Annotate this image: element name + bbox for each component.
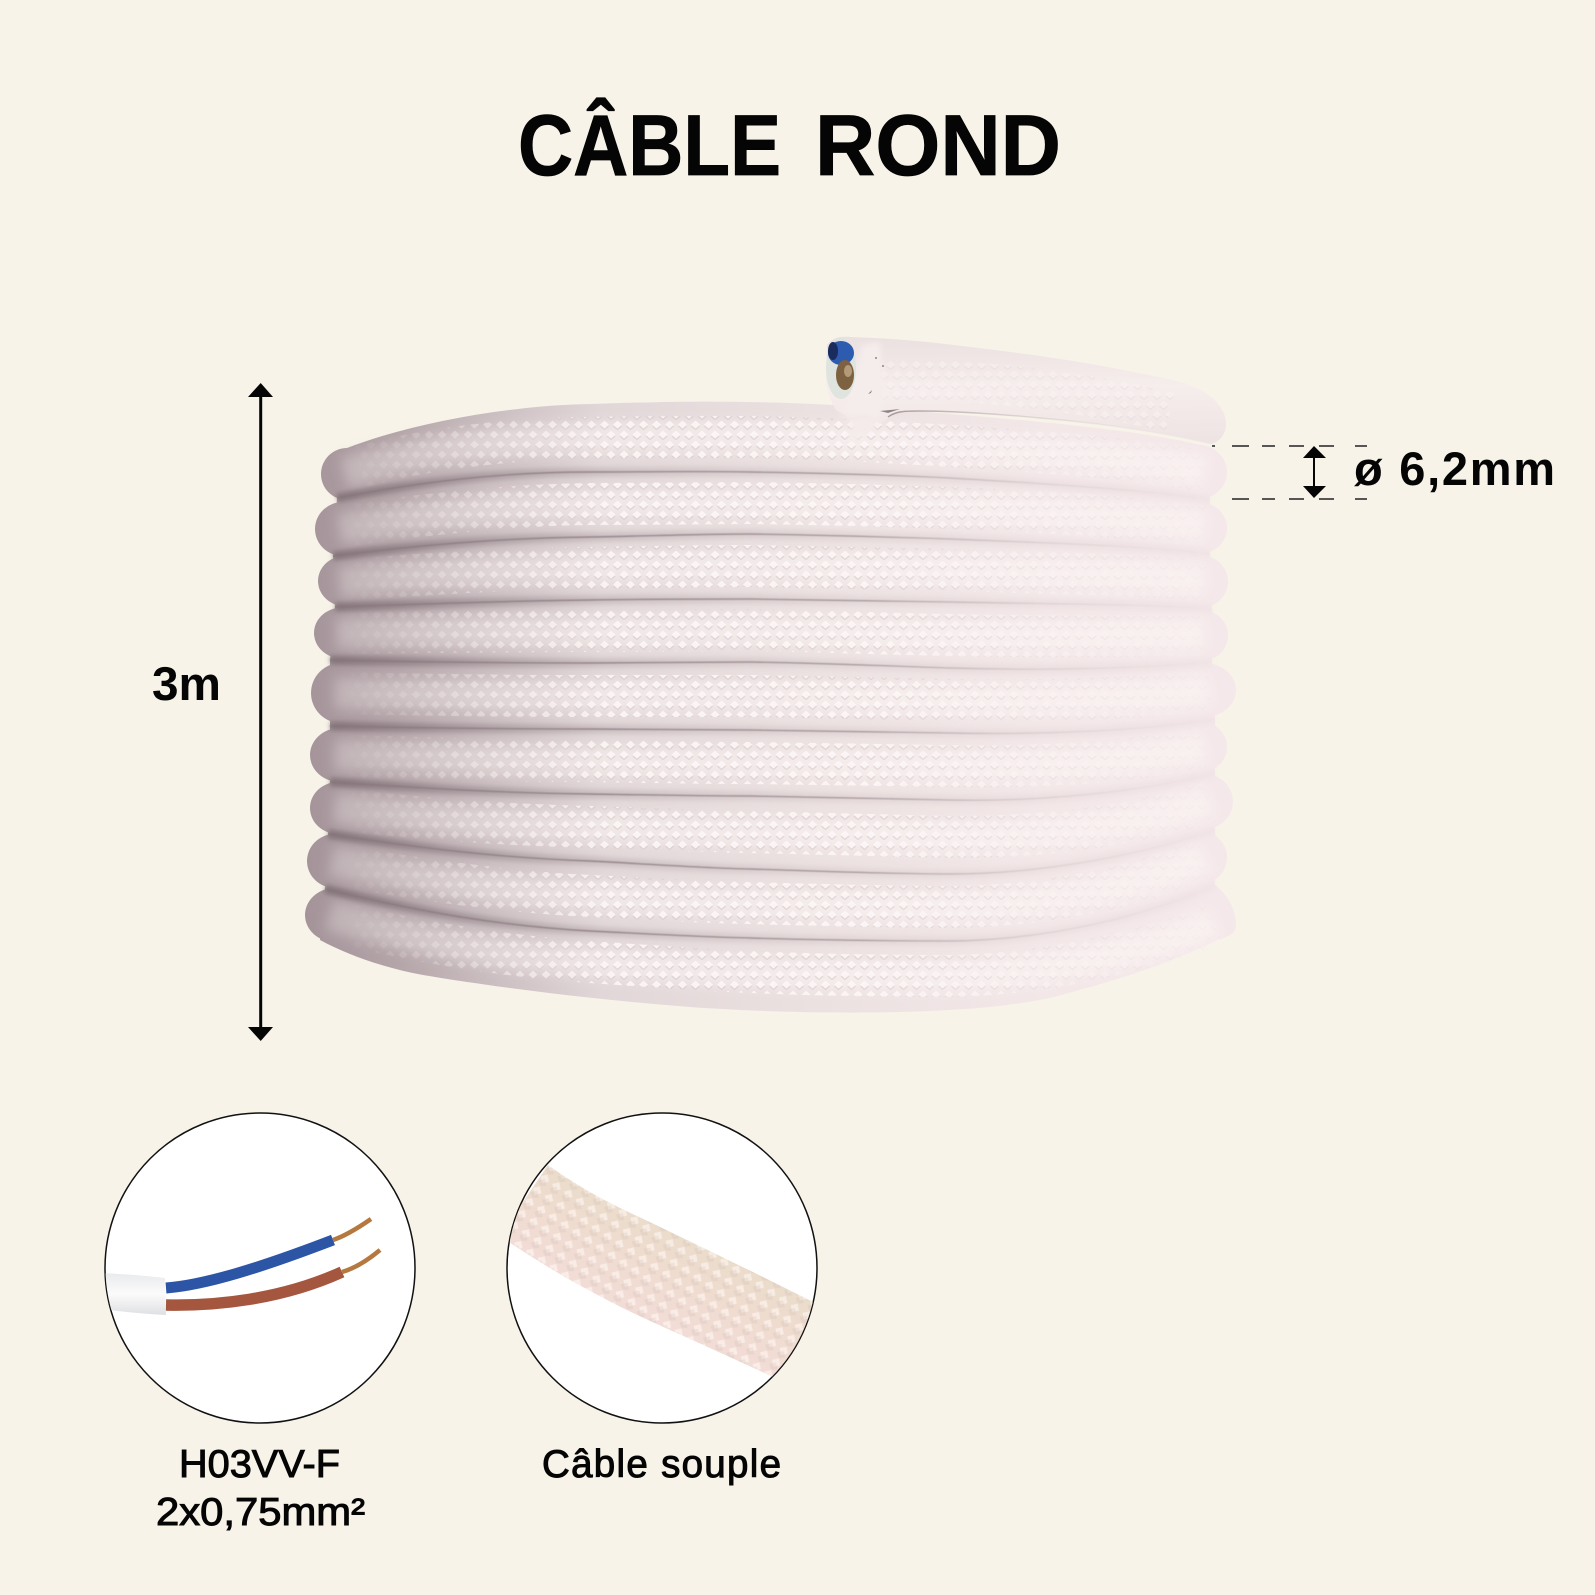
length label: 3m	[152, 657, 221, 710]
grooves between coils	[325, 472, 1215, 941]
title	[518, 97, 1061, 194]
braid texture	[378, 416, 1090, 997]
icon: blue wire	[166, 1240, 333, 1288]
icon: blue wire copper tip	[333, 1219, 371, 1240]
cut face with conductors	[826, 337, 856, 399]
detail circle: conductors	[100, 1113, 415, 1423]
title: CÂBLE	[518, 97, 781, 194]
diameter arrow	[1303, 446, 1326, 498]
cable coil	[305, 337, 1236, 1013]
coil silhouette	[305, 402, 1236, 1013]
icon: brown wire copper tip	[342, 1250, 380, 1272]
diameter label: ø 6,2mm	[1354, 442, 1555, 495]
icon: brown wire	[166, 1272, 342, 1305]
caption: flexible cable: Câble souple	[542, 1443, 781, 1486]
caption: conductor type: 2x0,75mm²	[156, 1491, 365, 1534]
title: ROND	[815, 98, 1061, 194]
loose cable end	[826, 337, 1226, 444]
diameter dashed guides	[1212, 446, 1367, 499]
dimension arrow: total length	[248, 383, 273, 1041]
caption: conductor type	[156, 1443, 365, 1534]
detail circle: braided cable	[500, 1113, 825, 1423]
icon: white sheath	[100, 1273, 166, 1315]
tube highlights	[330, 437, 1215, 976]
caption: conductor type: H03VV-F	[179, 1443, 340, 1486]
